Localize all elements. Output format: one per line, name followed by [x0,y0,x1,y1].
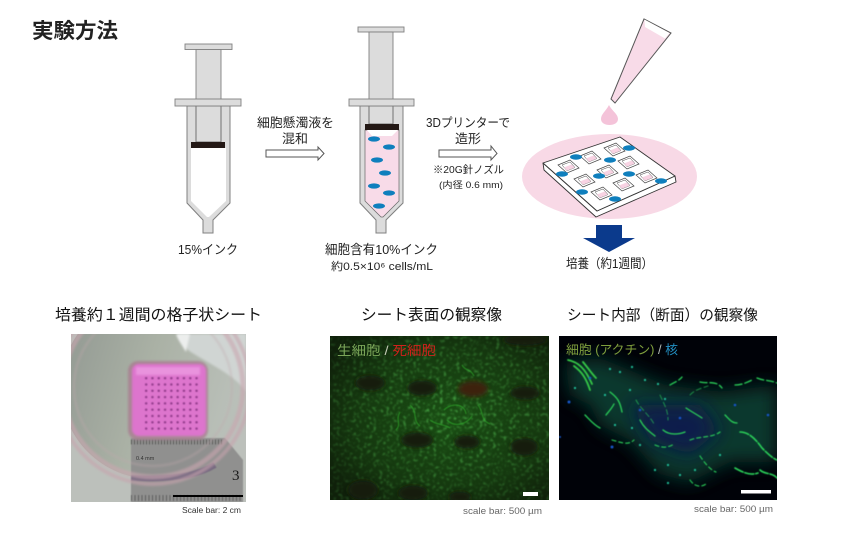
green filaments [568,360,777,486]
photo: sheet surface fluorescence [330,334,549,503]
label: 3D printer shaping: 造形 [455,132,482,146]
sheet lattice dots [143,375,200,432]
label: 3D printer shaping: 3Dプリンターで [426,116,510,130]
cells in ink [368,136,395,209]
arrow: blue down [583,225,635,252]
label: cells (actin) / nuclei: 細胞 (アクチン) / 核 [566,343,678,357]
nozzle note [433,163,504,190]
ruler [131,438,243,502]
label: 3D printer shaping [426,116,510,146]
label: mix cell suspension: 細胞懸濁液を [257,116,334,130]
label: 15% ink: 15%インク [178,242,238,257]
scale bar: photo 1 [173,495,243,497]
caption: scale 500 um, surface: scale bar: 500 µm [463,506,542,517]
scale bar: photo 3 [741,490,771,494]
arrow: printing [439,146,497,160]
label: cell-containing ink [325,242,438,273]
label: culture about 1 week: 培養（約1週間） [566,256,653,271]
caption: scale 500 um, section: scale bar: 500 µm [694,504,773,515]
icon: droplet [601,105,618,125]
dish rings [71,334,246,486]
heading: lattice sheet: 培養約１週間の格子状シート [55,306,262,324]
pink sheet [128,361,208,440]
dark lattice holes [348,334,547,503]
bright filaments [396,365,490,430]
dish with lattice sheet [522,134,697,219]
heading: surface image: シート表面の観察像 [361,306,502,324]
nozzle note: ※20G針ノズル [433,163,504,176]
syringe: cell-containing 10% ink [349,27,414,233]
caption: scale 2 cm: Scale bar: 2 cm [182,506,241,515]
label: mix cell suspension [257,116,334,146]
photo: lattice sheet in dish: 0.4 mm [136,456,155,462]
title: 実験方法 [32,20,118,43]
tissue glow [565,358,777,482]
label: cell-containing ink: 約0.5×10⁶ cells/mL [331,259,433,273]
syringe: 15% ink [175,44,241,233]
lattice sheet [543,137,676,217]
cells on sheet [556,145,667,202]
heading: cross section image: シート内部（断面）の観察像 [567,307,758,324]
photo: lattice sheet in dish: 3 [232,468,240,484]
icon: pipette tip [611,19,671,103]
scale bar: photo 2 [523,492,538,496]
photo: sheet cross-section fluorescence [559,336,777,500]
label: mix cell suspension: 混和 [282,131,308,146]
label: live / dead cells: 生細胞 / 死細胞 [337,343,436,358]
arrow: mixing [266,147,324,160]
label: cell-containing ink: 細胞含有10%インク [325,242,438,257]
photo: lattice sheet in dish [71,334,246,502]
nozzle note: (内径 0.6 mm) [439,179,503,190]
nuclei and cell dots [574,366,721,484]
